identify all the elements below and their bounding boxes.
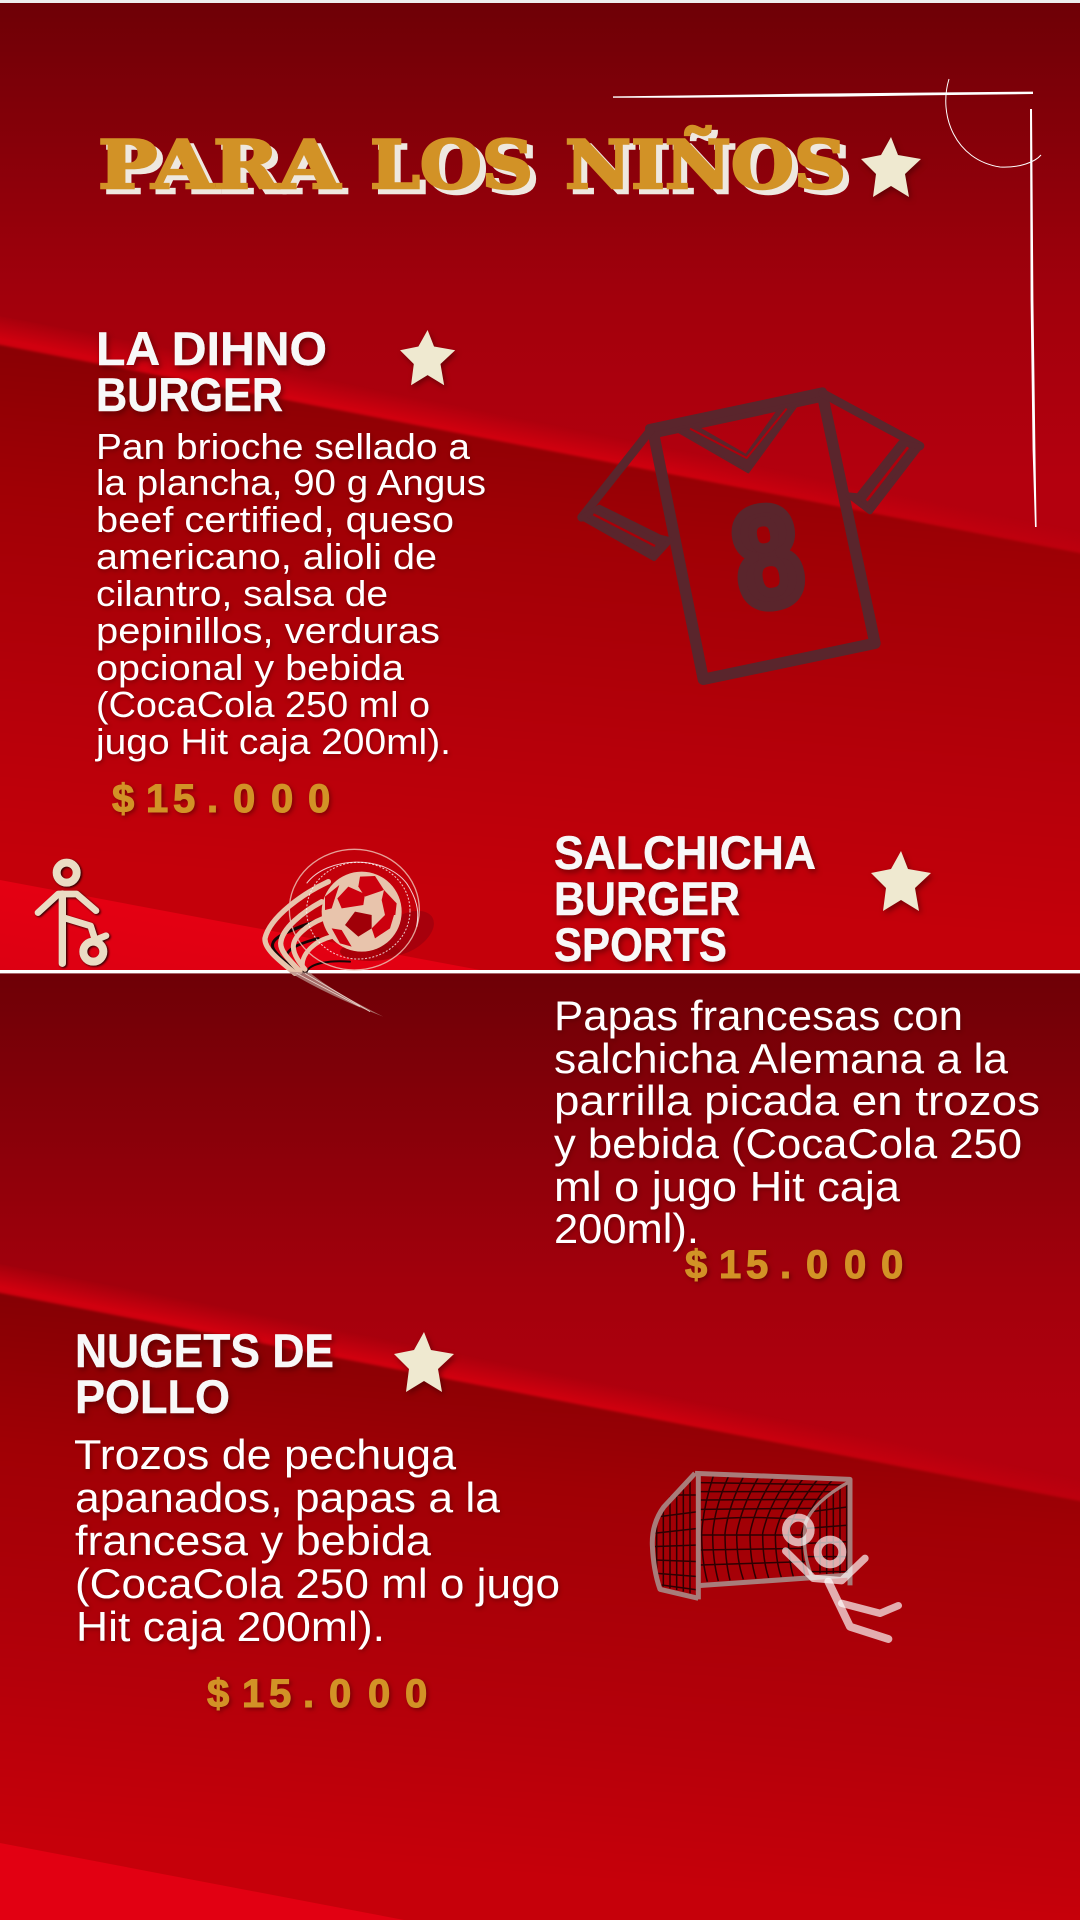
heading: [75, 1324, 334, 1423]
description: pepinillos, verduras: [96, 610, 440, 651]
title: NIÑOS: [571, 131, 852, 209]
description: beef certified, queso: [96, 499, 454, 540]
description: parrilla picada en trozos: [554, 1077, 1040, 1124]
icon: star: [871, 851, 931, 911]
heading: BURGER: [554, 872, 740, 925]
description: (CocaCola 250 ml o: [96, 684, 430, 725]
description: Trozos de pechuga: [74, 1431, 457, 1478]
description: Papas francesas con: [554, 992, 963, 1039]
title: PARA: [98, 126, 341, 204]
description: (CocaCola 250 ml o jugo: [75, 1560, 560, 1607]
description: salchicha Alemana a la: [554, 1035, 1009, 1082]
corner frame: chalk lines: [613, 79, 1041, 527]
description: Pan brioche sellado a: [96, 426, 471, 467]
description: opcional y bebida: [96, 647, 405, 688]
description: cilantro, salsa de: [96, 573, 388, 614]
description: francesa y bebida: [75, 1517, 432, 1564]
menu item: Salchicha Burger Sports: [554, 826, 1040, 1287]
price: $15.000: [112, 777, 330, 821]
icon: flying soccer ball: [265, 849, 442, 1017]
heading: LA DIHNO: [96, 322, 327, 375]
background: lower panel: [0, 970, 1080, 1920]
menu item: Nugets de Pollo: [74, 1324, 560, 1716]
title: [98, 126, 852, 209]
icon: title star: [861, 137, 921, 197]
description: la plancha, 90 g Angus: [96, 462, 486, 503]
heading: NUGETS DE: [75, 1324, 334, 1377]
title: LOS: [370, 126, 533, 204]
icon: star: [394, 1332, 454, 1392]
description: [554, 992, 1040, 1252]
heading: POLLO: [75, 1370, 230, 1423]
price: $15.000: [685, 1243, 903, 1287]
title: LOS: [376, 131, 539, 209]
goal net: [653, 1476, 850, 1593]
description: americano, alioli de: [96, 536, 437, 577]
heading: [554, 826, 816, 971]
heading: BURGER: [96, 368, 283, 421]
icon: player kicking ball: [38, 863, 106, 963]
heading: SALCHICHA: [554, 826, 816, 879]
goal frame: [652, 1473, 850, 1599]
icon: goal with net and goalkeeper: [652, 1473, 898, 1639]
heading: SPORTS: [554, 918, 727, 971]
heading: [96, 322, 327, 421]
title: NIÑOS: [565, 126, 846, 204]
goalkeeper: [786, 1518, 898, 1639]
description: Hit caja 200ml).: [76, 1603, 385, 1650]
description: [74, 1431, 560, 1650]
menu item: La Dihno Burger: [95, 322, 486, 821]
description: jugo Hit caja 200ml).: [95, 721, 451, 762]
background: upper panel: [0, 0, 1080, 980]
description: apanados, papas a la: [75, 1474, 501, 1521]
icon: star: [400, 330, 455, 385]
description: 200ml).: [554, 1205, 699, 1252]
description: y bebida (CocaCola 250: [554, 1120, 1022, 1167]
description: ml o jugo Hit caja: [554, 1163, 901, 1210]
price: $15.000: [207, 1672, 427, 1716]
icon: jersey number 8: 8: [721, 474, 814, 640]
title: PARA: [104, 131, 347, 209]
icon: jersey number 8: [582, 392, 920, 679]
description: [95, 426, 486, 762]
